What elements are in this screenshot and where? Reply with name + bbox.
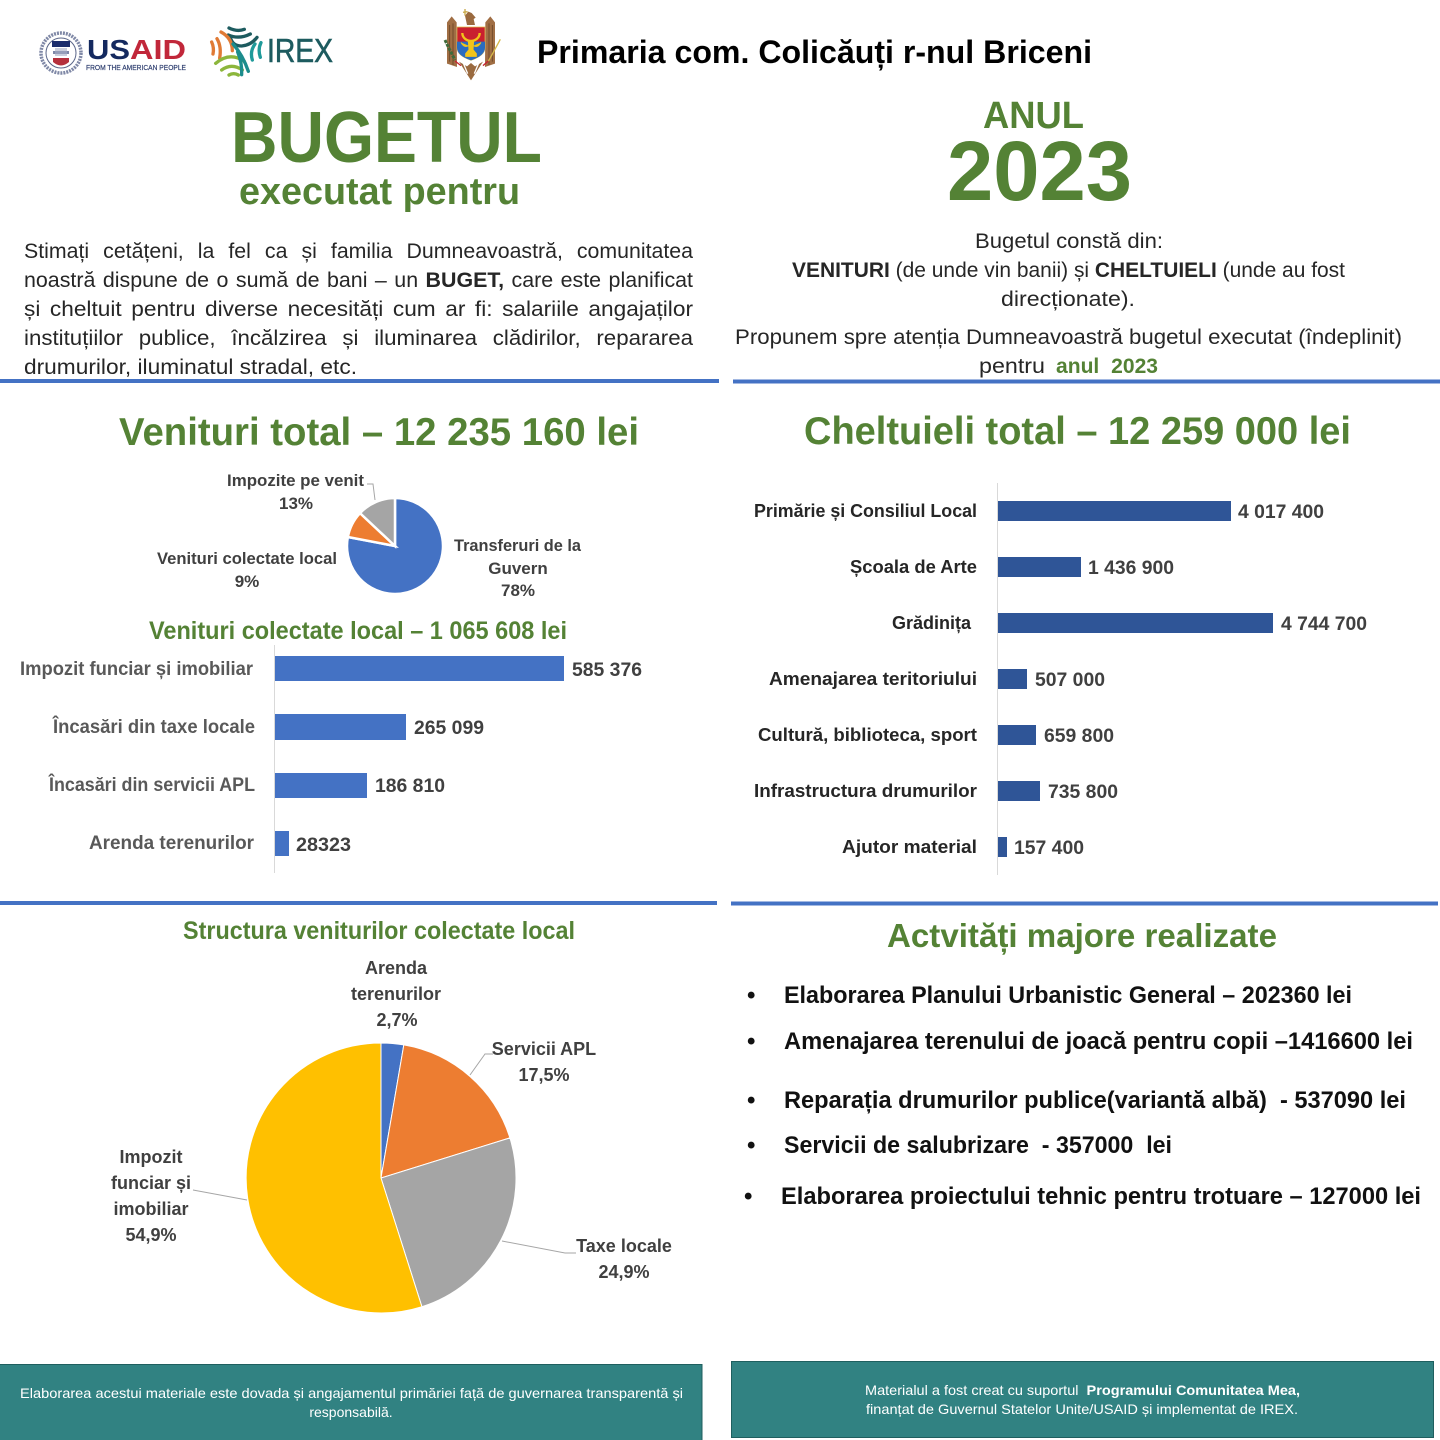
chart: expenses bars: Amenajarea teritoriului (769, 669, 977, 689)
list: major activities: Elaborarea proiectului tehnic pentru trotuare – 127000 lei (781, 1183, 1421, 1210)
list: major activities: Amenajarea terenului de joacă pentru copii –1416600 lei (784, 1028, 1413, 1055)
list: major activities: Servicii de salubrizare - 357000 lei (784, 1132, 1172, 1159)
chart: expenses bars: 1 436 900 (1088, 558, 1174, 579)
header (41, 9, 1092, 80)
text block: introduction: drumurilor, iluminatul stradal, etc. (24, 356, 357, 379)
label: income tax: Impozite pe venit (227, 471, 364, 490)
chart: expenses bars: Grădinița (892, 613, 972, 633)
callout: program credit: Materialul a fost creat cu suportul Programului Comunitatea Mea, (865, 1382, 1300, 1398)
subtitle: executat pentru: executat pentru (239, 171, 520, 213)
chart: expenses bars: Infrastructura drumurilor (754, 781, 977, 801)
chart: structure pie: 24,9% (598, 1262, 650, 1282)
chart: locally collected revenue bars: Încasări din servicii APL (48, 774, 255, 796)
chart: structure pie: terenurilor (351, 984, 441, 1004)
chart: locally collected revenue bars: 186 810 (375, 776, 445, 797)
chart: expenses bars: Școala de Arte (850, 557, 977, 577)
chart: expenses bars: 735 800 (1048, 782, 1118, 803)
chart: expenses bars: Cultură, biblioteca, sport (758, 725, 977, 745)
list: major activities: • (747, 1028, 755, 1055)
callout: program credit (732, 1362, 1434, 1438)
heading: major activities: Actvități majore realizate (887, 917, 1277, 955)
chart: locally collected revenue bars: Încasări din taxe locale (52, 716, 255, 738)
chart: expenses bars: 507 000 (1035, 670, 1105, 691)
chart: expenses bars: 4 744 700 (1281, 614, 1367, 635)
logo: IREX (212, 28, 333, 75)
chart: structure pie: 2,7% (376, 1010, 418, 1030)
title: BUGETUL: BUGETUL (231, 98, 542, 178)
chart: locally collected revenue bars: 28323 (296, 835, 351, 856)
logo: USAID (41, 33, 186, 73)
text block: budget explanation: anul 2023 (1056, 355, 1158, 378)
heading: total revenue: Venituri total – 12 235 160 lei (119, 411, 639, 454)
chart: locally collected revenue bars: Arenda terenurilor (89, 833, 255, 854)
title: ANUL: ANUL (983, 95, 1084, 137)
logo: IREX: IREX (267, 32, 333, 69)
chart: structure pie: 54,9% (125, 1225, 177, 1245)
chart: structure pie: funciar și (111, 1173, 191, 1193)
chart: structure pie: Arenda (365, 958, 428, 978)
heading: structure of locally collected revenue: Structura veniturilor colectate local (183, 917, 575, 945)
list: major activities: Elaborarea Planului Urbanistic General – 202360 lei (784, 982, 1352, 1009)
chart: structure pie: 17,5% (518, 1065, 570, 1085)
heading: total expenses: Cheltuieli total – 12 259 000 lei (804, 410, 1351, 453)
label: government transfers line 2: Guvern (488, 559, 548, 578)
icon: coat of arms of Moldova (445, 9, 500, 80)
text block: introduction: și cheltuit pentru diverse necesități cum ar fi: salariile angajaților (24, 298, 693, 321)
heading: locally collected revenue: Venituri colectate local – 1 065 608 lei (149, 617, 567, 645)
list: major activities: • (747, 982, 755, 1009)
callout: program credit: finanțat de Guvernul Statelor Unite/USAID și implementat de IREX. (866, 1401, 1298, 1417)
callout: transparency commitment: Elaborarea acestui materiale este dovada și angajamentul primăriei față de guvernarea transparentă și (20, 1385, 683, 1401)
text block: budget explanation: pentru (979, 355, 1045, 378)
text block: budget explanation: direcționate). (1001, 288, 1135, 311)
list: major activities: • (747, 1132, 755, 1159)
text block: introduction: instituțiilor publice, încălzirea și iluminarea clădirilor, repararea (24, 327, 693, 350)
text block: budget explanation (735, 230, 1402, 378)
chart: structure pie: Impozit (120, 1147, 182, 1167)
heading: municipality name: Primaria com. Colicăuți r-nul Briceni (537, 34, 1092, 70)
text block: introduction: noastră dispune de o sumă de bani – un BUGET, care este planificat (24, 269, 693, 292)
label: locally collected revenue: Venituri colectate local (157, 549, 337, 568)
chart: expenses bars: 659 800 (1044, 726, 1114, 747)
text block: introduction (24, 240, 693, 379)
logo: USAID: US (87, 34, 130, 65)
label: government transfers: Transferuri de la (454, 536, 582, 555)
callout: transparency commitment: responsabilă. (309, 1404, 393, 1420)
list: major activities: Reparația drumurilor publice(variantă albă) - 537090 lei (784, 1087, 1406, 1114)
text block: budget explanation: Bugetul constă din: (975, 230, 1163, 253)
logo: USAID: AID (130, 34, 186, 65)
logo: USAID: FROM THE AMERICAN PEOPLE (86, 63, 186, 72)
chart: locally collected revenue bars (20, 645, 642, 873)
chart: expenses bars: 4 017 400 (1238, 502, 1324, 523)
label: income tax share: 13% (279, 494, 313, 513)
text block: budget explanation: Propunem spre atenția Dumneavoastră bugetul executat (îndeplinit) (735, 326, 1402, 349)
text block: introduction: Stimați cetățeni, la fel ca și familia Dumneavoastră, comunitatea (24, 240, 693, 263)
list: major activities: • (747, 1087, 755, 1114)
text block: budget explanation: VENITURI (de unde vin banii) și CHELTUIELI (unde au fost (792, 259, 1345, 282)
chart: expenses bars (754, 483, 1367, 875)
chart: structure pie (111, 958, 672, 1313)
chart: expenses bars: Primărie și Consiliul Local (754, 501, 977, 521)
list: major activities (744, 982, 1421, 1210)
chart: expenses bars: 157 400 (1014, 838, 1084, 859)
chart: structure pie: imobiliar (113, 1199, 189, 1219)
label: locally collected share: 9% (235, 572, 259, 591)
title: year 2023: 2023 (947, 124, 1132, 218)
chart: locally collected revenue bars: 265 099 (414, 718, 484, 739)
chart: revenue pie (157, 471, 582, 600)
label: government transfers share: 78% (501, 581, 535, 600)
chart: structure pie: Taxe locale (576, 1236, 672, 1256)
chart: expenses bars: Ajutor material (842, 837, 977, 857)
chart: structure pie: Servicii APL (492, 1039, 596, 1059)
callout: transparency commitment (0, 1364, 702, 1440)
chart: locally collected revenue bars: Impozit funciar și imobiliar (20, 659, 254, 680)
chart: locally collected revenue bars: 585 376 (572, 660, 642, 681)
list: major activities: • (744, 1183, 752, 1210)
